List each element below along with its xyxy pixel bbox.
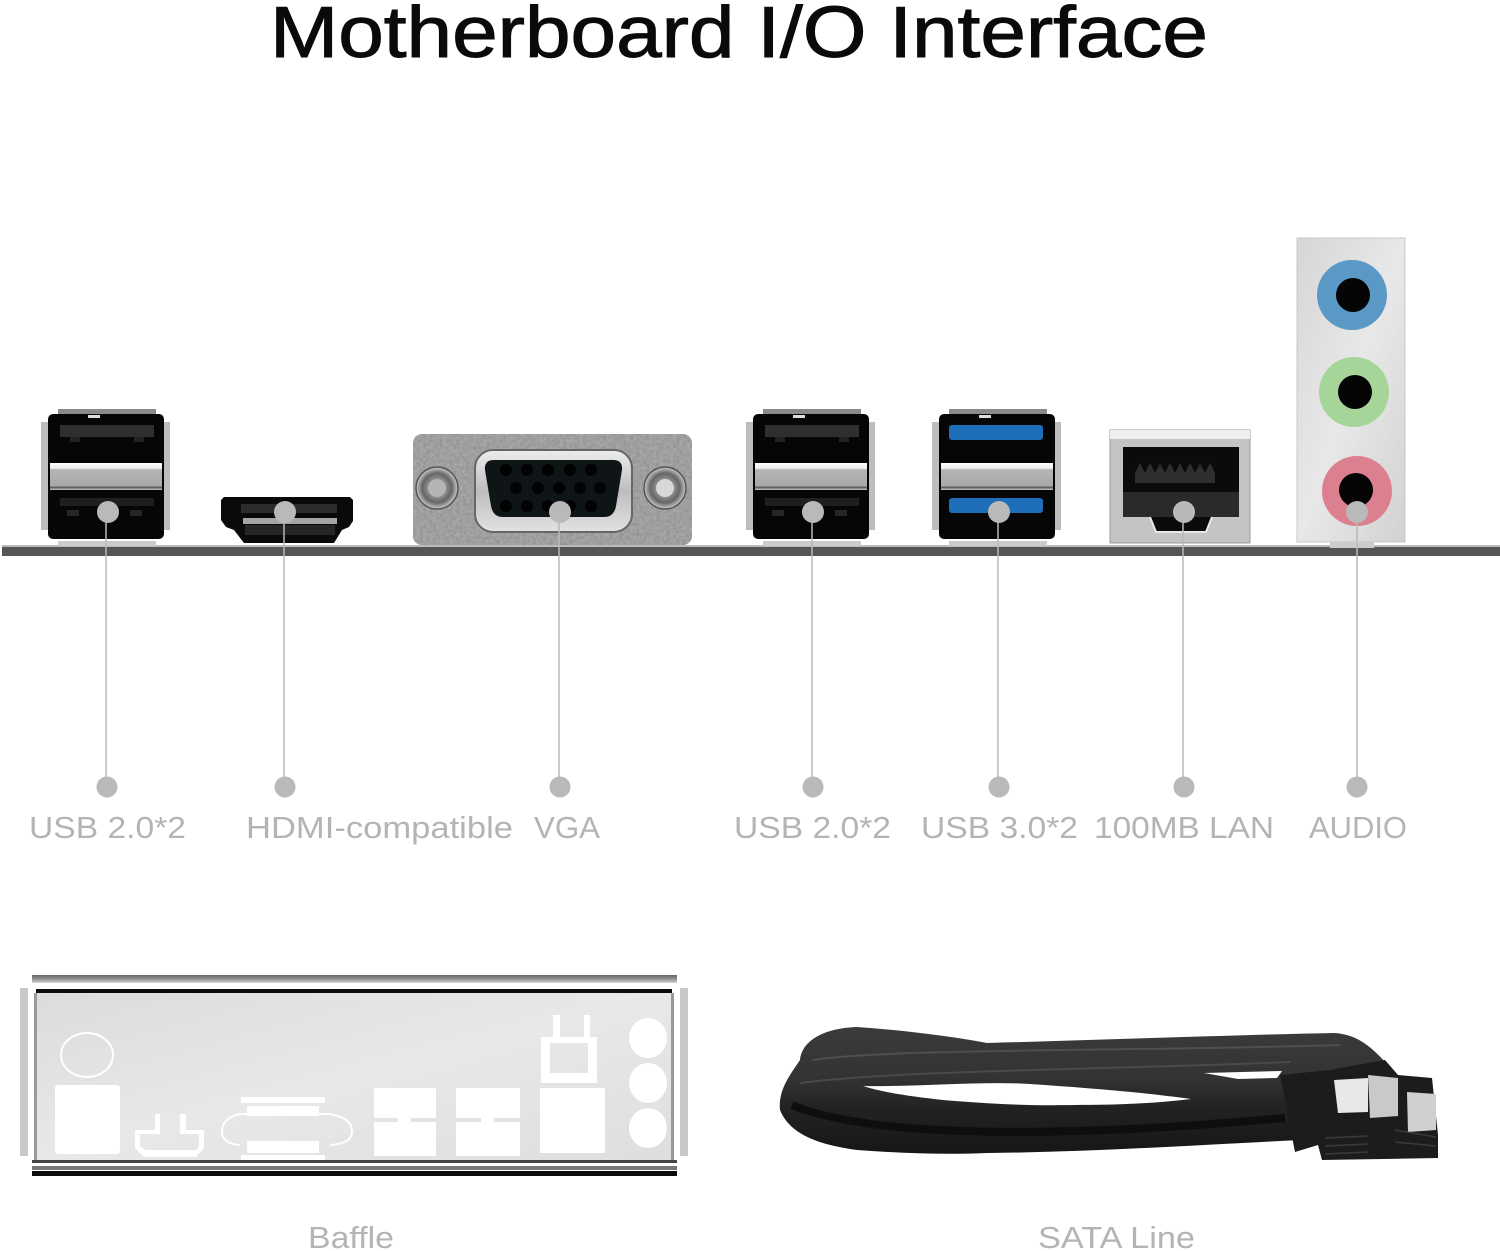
port labels: 100MB LAN	[1094, 810, 1274, 845]
port: HDMI	[221, 497, 353, 543]
port labels: USB 2.0*2	[734, 810, 891, 845]
port: USB 3.0	[932, 409, 1061, 546]
port labels: USB 3.0*2	[921, 810, 1078, 845]
port: VGA	[413, 434, 692, 545]
audio jack: green	[1319, 357, 1389, 427]
port labels: HDMI-compatible	[246, 810, 513, 845]
port labels	[29, 810, 1407, 845]
port: audio panel	[1297, 238, 1405, 548]
audio jack: pink	[1322, 456, 1392, 526]
motherboard edge bar	[2, 545, 1500, 556]
port labels: AUDIO	[1309, 810, 1407, 845]
audio jack: blue	[1317, 260, 1387, 330]
callout lines and dots	[96, 501, 1368, 798]
port labels: USB 2.0*2	[29, 810, 186, 845]
port: USB 2.0 left	[41, 409, 170, 546]
port labels: VGA	[534, 810, 600, 845]
SATA cable	[780, 1027, 1438, 1160]
baffle	[20, 975, 688, 1176]
port: USB 2.0 middle	[746, 409, 875, 546]
port: LAN	[1110, 430, 1250, 543]
